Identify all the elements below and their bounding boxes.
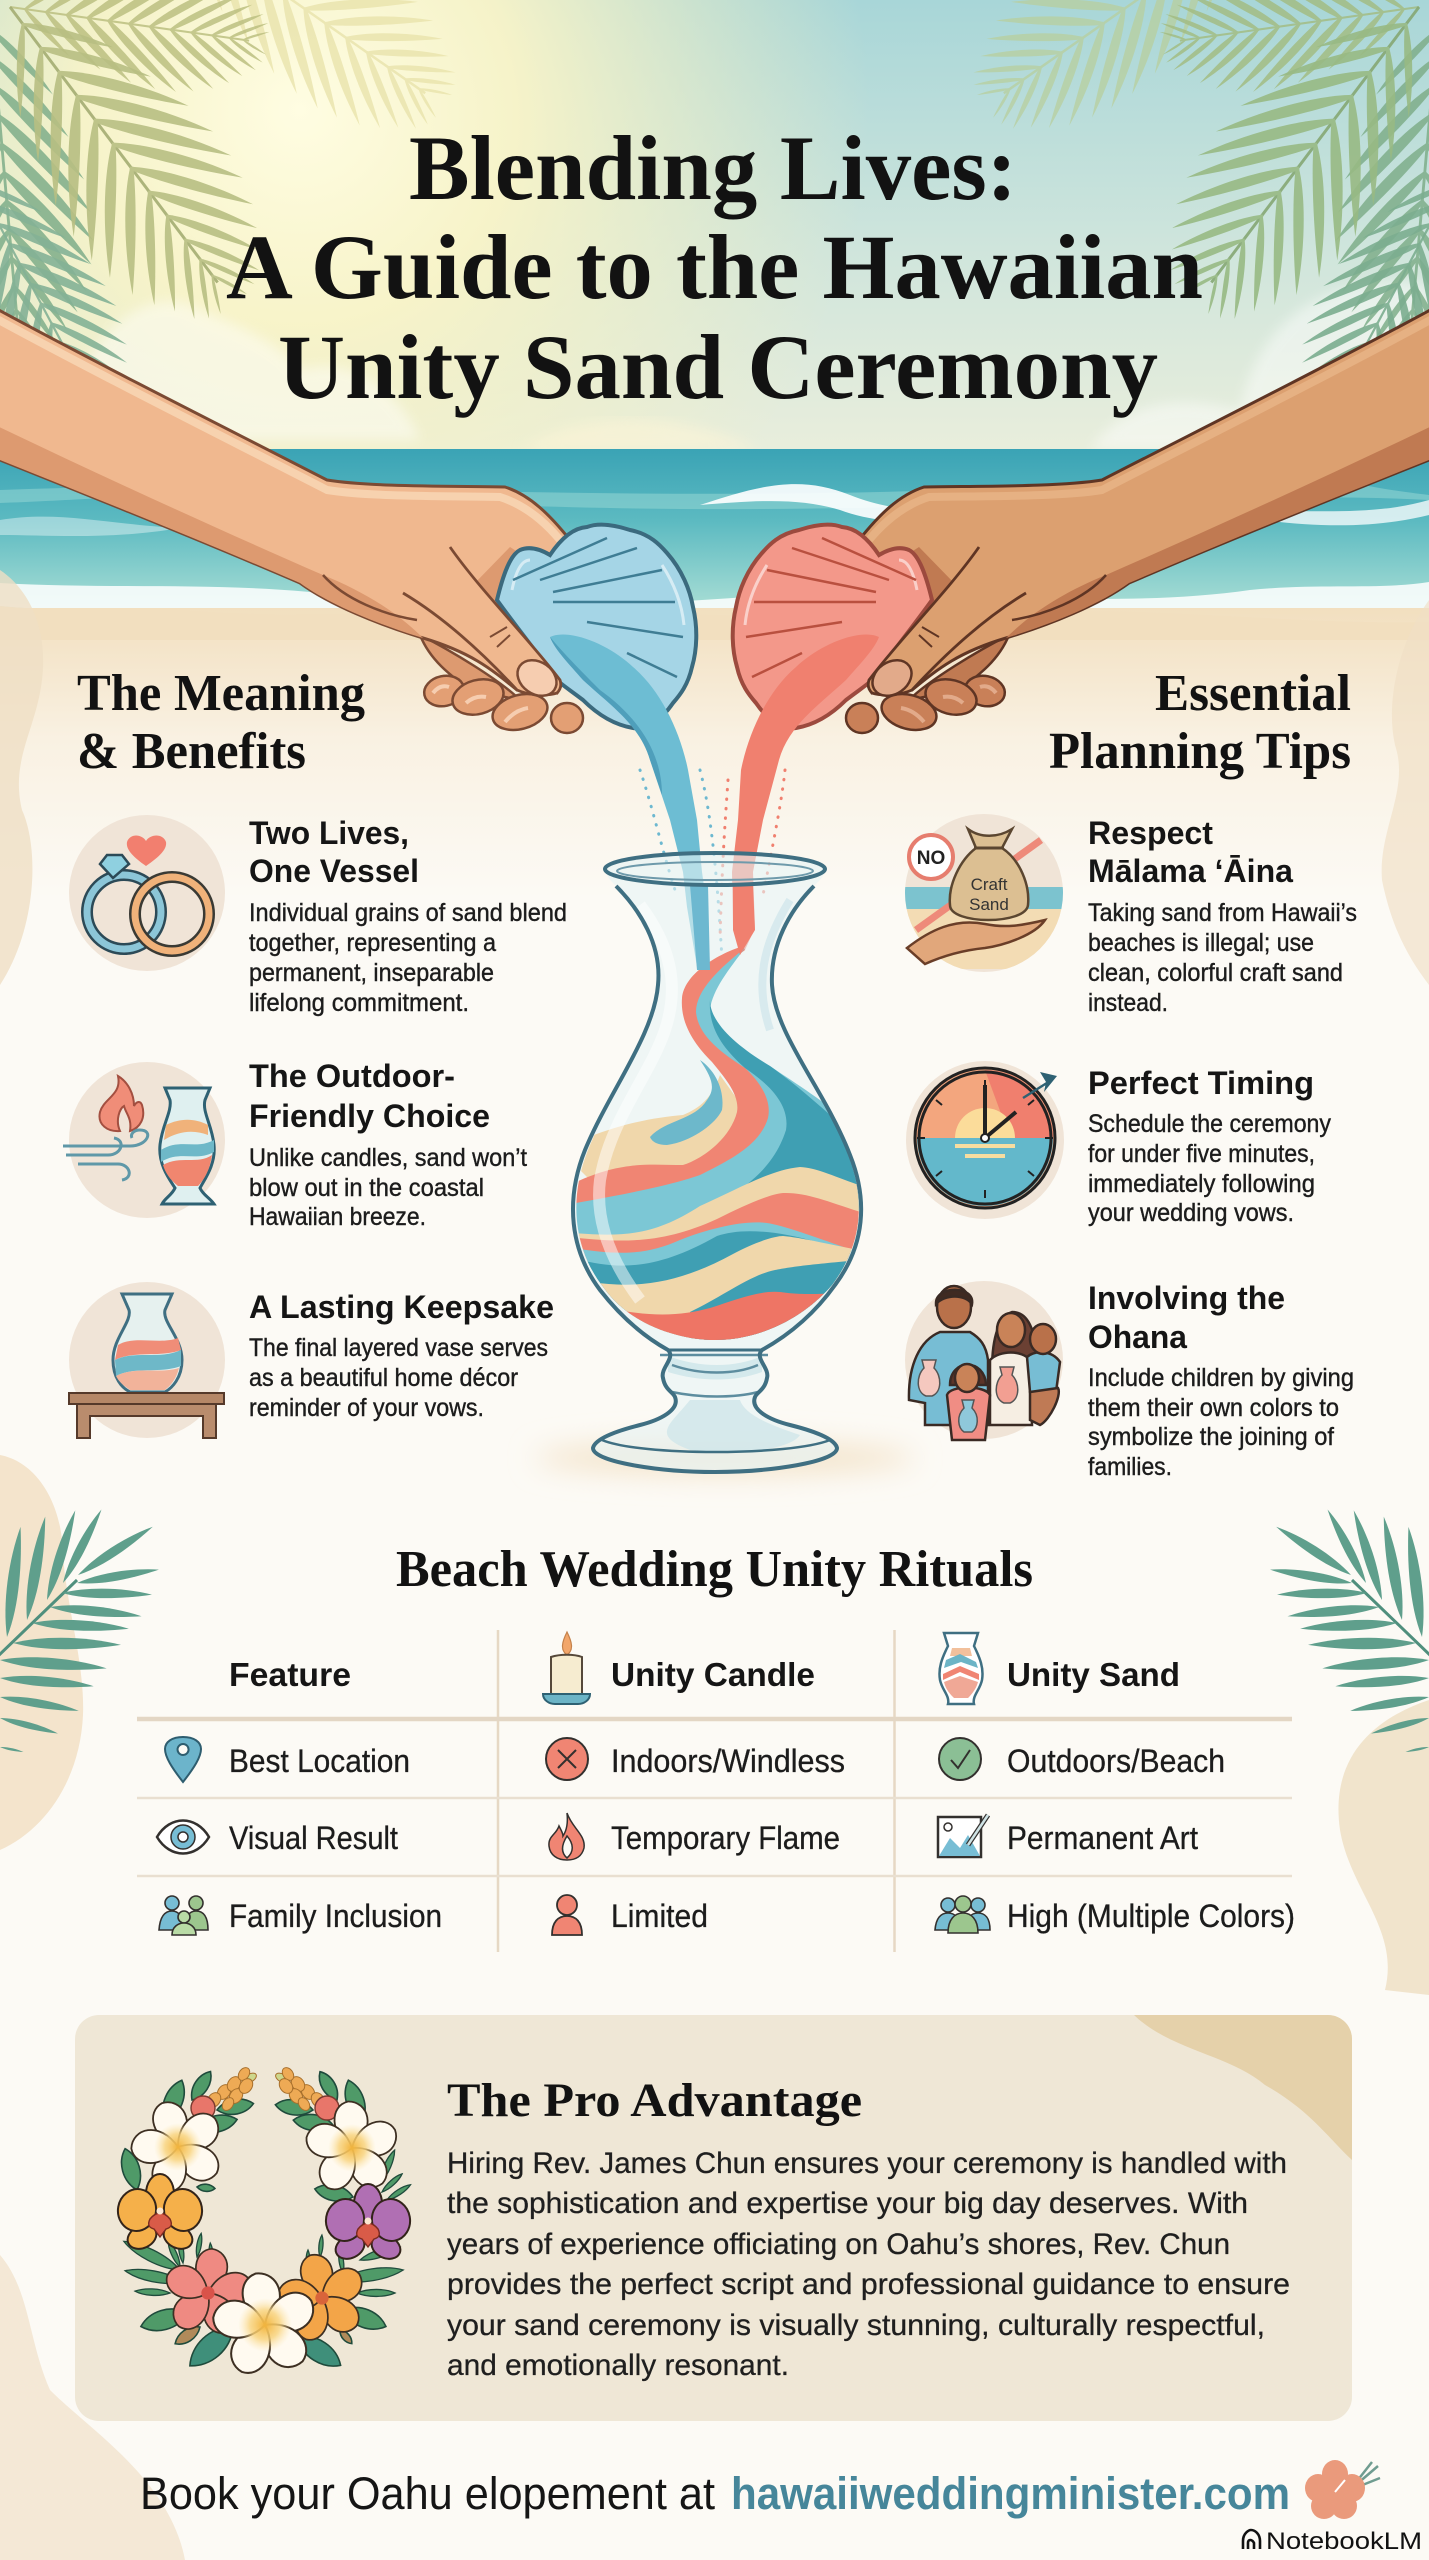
- glass body: [573, 852, 861, 1472]
- text block: The Outdoor-Friendly Choice: Unlike candles, sand won’t: [249, 1144, 527, 1172]
- sand layers in vase: [576, 948, 859, 1340]
- text block: Perfect Timing: for under five minutes,: [1088, 1140, 1315, 1168]
- icon: family with vases: [905, 1281, 1063, 1440]
- table row: Visual Result: [157, 1813, 1198, 1860]
- blue sand stream: [550, 635, 710, 967]
- plumeria top left: [121, 2093, 234, 2204]
- text block: A Lasting Keepsake: A Lasting Keepsake: [249, 1289, 554, 1325]
- stream tails inside the neck: [690, 885, 710, 970]
- section heading: The Meaning & Benefits: & Benefits: [77, 723, 306, 780]
- left hand with blue shell: [0, 308, 696, 736]
- text block: Involving the Ohana: [1088, 1280, 1354, 1481]
- table row: Visual Result: Visual Result: [229, 1820, 398, 1856]
- text block: Perfect Timing: Schedule the ceremony: [1088, 1110, 1331, 1138]
- icon: single person: [552, 1895, 582, 1935]
- text block: A Lasting Keepsake: The final layered vase serves: [249, 1334, 548, 1362]
- table row: Best Location: Outdoors/Beach: [1007, 1743, 1225, 1779]
- palm frond mid right: [1269, 1507, 1429, 1753]
- table row: Visual Result: Permanent Art: [1007, 1820, 1198, 1856]
- text block: Respect Malama Aina: Mālama ʻĀina: [1088, 853, 1293, 889]
- table row: Family Inclusion: Family Inclusion: [229, 1898, 442, 1934]
- icon: flame, wind and vase: [63, 1062, 225, 1218]
- title: [226, 117, 1203, 418]
- text block: The Outdoor-Friendly Choice: Hawaiian breeze.: [249, 1203, 426, 1231]
- text block: The Outdoor-Friendly Choice: Friendly Choice: [249, 1098, 490, 1134]
- panel body text: [447, 2147, 1290, 2382]
- section heading: The Meaning & Benefits: The Meaning: [77, 665, 365, 722]
- icon: check circle: [939, 1738, 981, 1780]
- panel body text: Hiring Rev. James Chun ensures your ceremony is handled with: [447, 2147, 1287, 2180]
- panel body text: and emotionally resonant.: [447, 2349, 789, 2382]
- table row: Best Location: Best Location: [229, 1743, 410, 1779]
- plumeria top right: [298, 2098, 404, 2201]
- text block: Two Lives, One Vessel: [249, 815, 567, 1017]
- palm fronds top left: [0, 0, 490, 449]
- panel body text: the sophistication and expertise your big day deserves. With: [447, 2187, 1248, 2220]
- icon: x circle: [546, 1738, 588, 1780]
- icon: craft sand bag: Craft: [971, 875, 1008, 894]
- title line 2: A Guide to the Hawaiian: [226, 216, 1203, 318]
- footer call to action: [140, 2468, 1290, 2519]
- plumeria bottom: [209, 2273, 319, 2380]
- text block: A Lasting Keepsake: as a beautiful home décor: [249, 1364, 518, 1392]
- text block: Involving the Ohana: symbolize the joining of: [1088, 1423, 1334, 1451]
- sand streams and central vase: [550, 635, 880, 1472]
- text block: Perfect Timing: immediately following: [1088, 1170, 1315, 1198]
- table row: Family Inclusion: [159, 1895, 1295, 1935]
- text block: Respect Malama Aina: Taking sand from Hawaii’s: [1088, 899, 1357, 927]
- text block: The Outdoor-Friendly Choice: [249, 1058, 527, 1231]
- icon: rings: [69, 815, 225, 971]
- icon: candle: [543, 1632, 590, 1704]
- panel body text: provides the perfect script and professional guidance to ensure: [447, 2268, 1290, 2301]
- NotebookLM mark: NotebookLM: [1266, 2528, 1422, 2555]
- text block: Two Lives, One Vessel: Individual grains of sand blend: [249, 899, 567, 927]
- table row: Best Location: [165, 1737, 1225, 1782]
- icon: flame: [549, 1813, 584, 1860]
- title line 1: Blending Lives:: [409, 117, 1017, 219]
- text block: Two Lives, One Vessel: lifelong commitment.: [249, 989, 469, 1017]
- table row: Family Inclusion: High (Multiple Colors): [1007, 1898, 1295, 1934]
- text block: Involving the Ohana: families.: [1088, 1453, 1172, 1481]
- text block: Respect Malama Aina: beaches is illegal; use: [1088, 929, 1314, 957]
- orange plumeria: [271, 2250, 371, 2349]
- icon: craft sand bag: NO: [917, 848, 945, 869]
- text block: Respect Malama Aina: Respect: [1088, 815, 1213, 851]
- falling grains: [640, 770, 722, 960]
- sand shadow under vase: [535, 1442, 915, 1474]
- table header row: Feature: [229, 1656, 351, 1693]
- icon: map pin: [165, 1737, 201, 1782]
- icon: craft sand bag: [905, 814, 1063, 972]
- section heading: Essential Planning Tips: [1049, 665, 1351, 780]
- panel heading: The Pro Advantage: [447, 2074, 862, 2127]
- wreath of flowers and leaves: [115, 2065, 413, 2380]
- icon: family: [159, 1896, 208, 1935]
- text block: Involving the Ohana: Involving the: [1088, 1280, 1285, 1316]
- text block: Involving the Ohana: Include children by giving: [1088, 1364, 1354, 1392]
- table header row: [229, 1632, 1180, 1704]
- table row: Best Location: Indoors/Windless: [611, 1743, 845, 1779]
- palm fronds top right: [939, 0, 1429, 449]
- text block: A Lasting Keepsake: [249, 1289, 554, 1422]
- icon: eye: [157, 1820, 209, 1854]
- footer call to action: hawaiiweddingminister.com: [731, 2468, 1290, 2519]
- text block: Two Lives, One Vessel: permanent, inseparable: [249, 959, 494, 987]
- icon: hibiscus: [1305, 2460, 1380, 2519]
- section heading: Essential Planning Tips: Essential: [1155, 665, 1351, 722]
- text block: Respect Malama Aina: [1088, 815, 1357, 1017]
- palm frond mid left: [0, 1507, 160, 1753]
- vase rim: [605, 853, 825, 885]
- text block: Respect Malama Aina: clean, colorful craft sand: [1088, 959, 1343, 987]
- table row: Visual Result: Temporary Flame: [611, 1820, 840, 1856]
- icon: sunset clock: [906, 1061, 1064, 1219]
- broad leaves: [117, 2068, 389, 2374]
- narrow fern leaves: [121, 2149, 412, 2296]
- section heading: Beach Wedding Unity Rituals: Beach Wedding Unity Rituals: [396, 1541, 1033, 1598]
- pink plumeria: [150, 2238, 263, 2350]
- panel body text: your sand ceremony is visually stunning, culturally respectful,: [447, 2309, 1265, 2342]
- panel body text: years of experience officiating on Oahu’s shores, Rev. Chun: [447, 2228, 1230, 2261]
- purple orchid: [323, 2184, 413, 2263]
- right hand with coral shell: [733, 308, 1429, 736]
- icon: family group: [935, 1896, 990, 1933]
- table header row: Unity Sand: [1007, 1656, 1180, 1693]
- footer call to action: Book your Oahu elopement at: [140, 2468, 715, 2519]
- glass highlights: [599, 905, 672, 1300]
- ginger blossoms: [204, 2065, 258, 2113]
- text block: The Outdoor-Friendly Choice: The Outdoor-: [249, 1058, 455, 1094]
- text block: Two Lives, One Vessel: Two Lives,: [249, 815, 409, 851]
- text block: Perfect Timing: your wedding vows.: [1088, 1199, 1294, 1227]
- icon: art canvas: [938, 1815, 988, 1857]
- text block: Involving the Ohana: Ohana: [1088, 1319, 1187, 1355]
- table row: Family Inclusion: Limited: [611, 1898, 708, 1934]
- text block: The Outdoor-Friendly Choice: blow out in the coastal: [249, 1174, 484, 1202]
- text block: Involving the Ohana: them their own colors to: [1088, 1394, 1339, 1422]
- title line 3: Unity Sand Ceremony: [278, 316, 1158, 418]
- section heading: Essential Planning Tips: Planning Tips: [1049, 723, 1351, 780]
- text block: Respect Malama Aina: instead.: [1088, 989, 1168, 1017]
- text block: Perfect Timing: Perfect Timing: [1088, 1065, 1314, 1101]
- table header row: Unity Candle: [611, 1656, 815, 1693]
- text block: Perfect Timing: [1088, 1065, 1331, 1227]
- text block: Two Lives, One Vessel: together, representing a: [249, 929, 496, 957]
- text block: A Lasting Keepsake: reminder of your vows.: [249, 1394, 484, 1422]
- coral sand stream: [732, 635, 879, 950]
- vase outline: [573, 886, 861, 1472]
- panel: The Pro Advantage: [75, 2015, 1352, 2421]
- text block: Two Lives, One Vessel: One Vessel: [249, 853, 419, 889]
- section heading: The Meaning & Benefits: [77, 665, 365, 780]
- icon: small sand vase: [939, 1633, 983, 1704]
- icon: vase on table: [69, 1282, 225, 1438]
- decorative sand drifts along edges: [0, 570, 1429, 2560]
- comparison table: [137, 1630, 1295, 1952]
- icon: craft sand bag: Sand: [969, 895, 1009, 914]
- orange orchid: [115, 2174, 205, 2253]
